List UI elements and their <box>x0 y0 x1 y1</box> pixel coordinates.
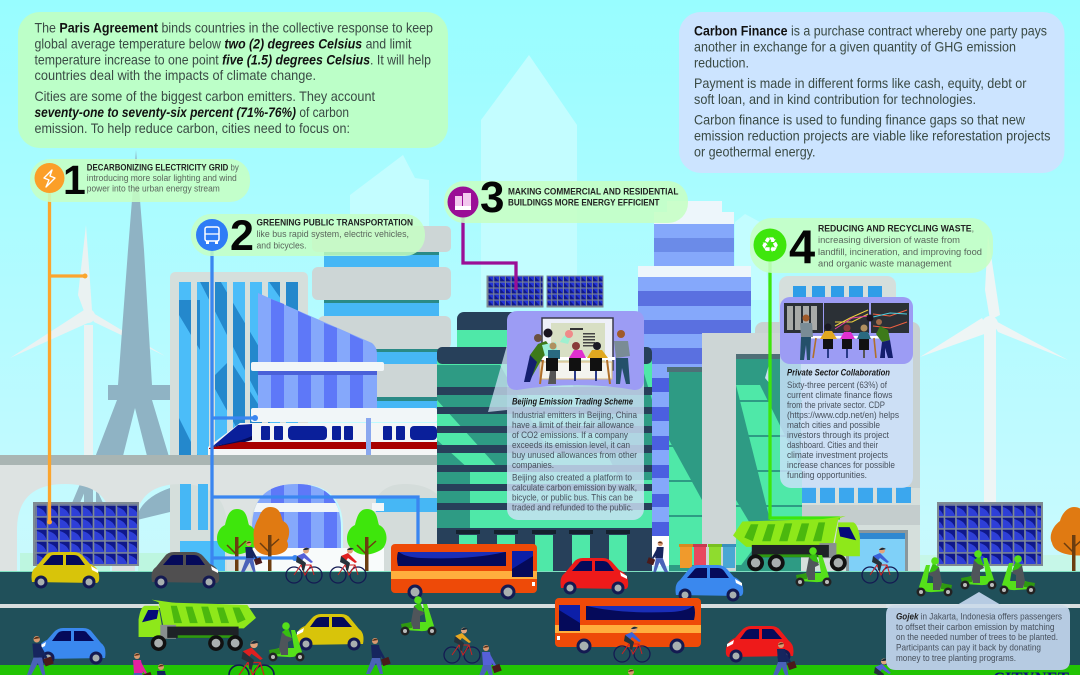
panel: Paris Agreement: seventy-one to seventy-six percent (71%-76%) of carbon <box>34 104 349 120</box>
icon: lightning bolt <box>34 163 64 193</box>
orange bus bottom <box>555 598 701 654</box>
panel: Carbon Finance: reduction. <box>694 54 749 70</box>
step 2: greening public transportation <box>191 212 425 260</box>
icon: recycle <box>754 228 786 262</box>
text: private sector: investors through its project <box>787 430 889 440</box>
panel: Paris Agreement: The Paris Agreement binds countries in the collective response to keep <box>34 20 433 36</box>
text: Beijing scheme: exceeds its emission level, it can <box>512 440 630 450</box>
right grey and teal buildings <box>667 276 920 572</box>
text: Beijing scheme: Beijing also created a platform to <box>512 472 632 482</box>
text: private sector: climate investment projects <box>787 450 888 460</box>
text: Beijing scheme: traded and refunded to the public. <box>512 502 633 512</box>
step 1: decarbonizing electricity grid: introducing more solar lighting and wind <box>87 173 237 183</box>
panel: Carbon Finance: another in exchange for a given quantity of GHG emission <box>694 38 1016 54</box>
panel: Paris Agreement: emission. To help reduce carbon, cities need to focus on: <box>34 120 350 136</box>
step 4: reducing and recycling waste: REDUCING AND RECYCLING WASTE, <box>818 224 974 234</box>
callout: Gojek: to offset their carbon emission by matching <box>896 622 1054 632</box>
text: Beijing scheme: of CO2 emissions. If a company <box>512 430 628 440</box>
text: private sector: current climate finance flows <box>787 390 893 400</box>
icon: building <box>448 186 478 218</box>
text: private sector: from the private sector. CDP <box>787 400 885 410</box>
panel: Paris Agreement: temperature increase to one point five (1.5) degrees Celsius. It will help <box>34 51 431 67</box>
step 4: reducing and recycling waste: landfill, incineration, and improving food <box>818 247 982 257</box>
text: Beijing scheme: Beijing Emission Trading Scheme <box>512 396 634 408</box>
panel: Paris Agreement: countries deal with the impacts of climate change. <box>34 67 316 83</box>
orange bus top <box>391 544 537 600</box>
scooters <box>400 596 436 636</box>
text: Beijing scheme: have a limit of their fair allowance <box>512 420 634 430</box>
illustration: team at whiteboard <box>507 311 644 390</box>
step 1: decarbonizing electricity grid: DECARBONIZING ELECTRICITY GRID by <box>87 162 239 172</box>
pedestrians <box>27 636 54 675</box>
step 4: reducing and recycling waste: and organic waste management <box>818 258 952 268</box>
step 4: reducing and recycling waste <box>750 218 993 273</box>
text: private sector: Private Sector Collaboration <box>787 368 890 379</box>
panel: Carbon Finance <box>679 12 1064 173</box>
text: private sector: Sixty-three percent (63%) of <box>787 380 887 390</box>
text: Beijing scheme <box>512 396 638 512</box>
step 2: greening public transportation: 2 <box>230 212 254 260</box>
connector lines <box>47 193 840 575</box>
recycling bins <box>679 544 736 568</box>
red car bottom <box>726 626 794 662</box>
step 1: decarbonizing electricity grid: power into the urban energy stream <box>87 184 220 194</box>
right wind turbine <box>920 235 1068 510</box>
callout: Gojek: Participants can pay it back by donating <box>896 642 1041 652</box>
callout: Gojek: Gojek in Jakarta, Indonesia offers passengers <box>896 612 1062 622</box>
text: private sector: increase chances for possible <box>787 460 895 470</box>
panel: Carbon Finance: Carbon finance is used to funding finance gaps so that new <box>694 112 1026 128</box>
grass strip <box>0 665 1080 675</box>
text: private sector <box>787 368 899 480</box>
left wind turbine <box>10 225 165 465</box>
panel: Paris Agreement: Cities are some of the biggest carbon emitters. They account <box>34 88 375 104</box>
text: private sector: dashboard. Cities and their <box>787 440 878 450</box>
building: blue striped tower <box>170 272 310 572</box>
eiffel tower <box>94 150 170 460</box>
icon: bus <box>196 219 228 251</box>
panel: Carbon Finance: emission reduction projects are viable like reforestation projects <box>694 128 1050 144</box>
text: Beijing scheme: bicycle, or public bus. This can be <box>512 492 633 502</box>
dump truck right <box>733 516 860 571</box>
cyclists <box>286 548 322 583</box>
road <box>0 571 1080 666</box>
illustration: team with market screens <box>780 297 913 364</box>
step 3: energy efficient buildings: MAKING COMMERCIAL AND RESIDENTIAL <box>508 186 679 196</box>
ghost skyline <box>350 55 770 300</box>
callout: Gojek: money to tree planting programs. <box>896 653 1016 663</box>
text: Beijing scheme: Industrial emitters in Beijing, China <box>512 410 638 420</box>
step 1: decarbonizing electricity grid <box>30 157 250 203</box>
panel: Paris Agreement: global average temperature below two (2) degrees Celsius and limit <box>34 36 412 52</box>
vehicles <box>27 516 1036 675</box>
panel: Paris Agreement <box>18 12 448 148</box>
step 4: reducing and recycling waste: 4 <box>789 220 815 273</box>
text: private sector: match cities and possible <box>787 420 880 430</box>
card: Private Sector Collaboration <box>780 297 913 488</box>
panel: Carbon Finance: Carbon Finance is a purchase contract whereby one party pays <box>694 22 1047 38</box>
building: grey banded block <box>312 226 451 414</box>
text: Beijing scheme: companies. <box>512 460 554 470</box>
step 3: energy efficient buildings: 3 <box>480 173 504 222</box>
yellow car <box>32 552 99 588</box>
elevated train <box>208 418 437 458</box>
icon: recycle: ♻ <box>761 233 779 257</box>
callout: Gojek: on the needed number of trees to be planted. <box>896 632 1058 642</box>
step 1: decarbonizing electricity grid: 1 <box>63 157 86 203</box>
step 2: greening public transportation: GREENING PUBLIC TRANSPORTATION <box>256 218 413 228</box>
panel: Carbon Finance: soft loan, and in kind contribution for technologies. <box>694 91 976 107</box>
viaduct <box>0 455 437 574</box>
panel: Carbon Finance: Payment is made in different forms like cash, equity, debt or <box>694 75 1027 91</box>
step 2: greening public transportation: and bicycles. <box>256 240 306 250</box>
red car top <box>560 558 628 594</box>
big tiered blue tower <box>638 201 751 566</box>
step 3: energy efficient buildings <box>444 173 688 223</box>
green striped central building <box>437 312 652 572</box>
solar panels right <box>938 503 1042 565</box>
step 2: greening public transportation: like bus rapid system, electric vehicles, <box>256 229 409 239</box>
text: Beijing scheme: buy unused allowances from other <box>512 450 637 460</box>
blue car left <box>38 628 106 664</box>
trees <box>217 507 1080 573</box>
callout: Gojek <box>886 592 1070 670</box>
yellow car middle <box>296 614 364 650</box>
step 3: energy efficient buildings: BUILDINGS MORE ENERGY EFFICIENT <box>508 198 660 208</box>
step 4: reducing and recycling waste: increasing diversion of waste from <box>818 235 960 245</box>
text: Beijing scheme: calculate carbon emission by walk, <box>512 482 637 492</box>
grey car <box>152 552 219 588</box>
ground strip behind right side <box>920 555 1080 572</box>
building: curved blue block <box>251 293 437 422</box>
solar panels left <box>34 503 138 565</box>
card: Beijing Emission Trading Scheme <box>488 311 644 520</box>
rooftop solar panels <box>487 276 603 307</box>
dump truck left <box>139 600 256 651</box>
text: private sector: (https://www.cdp.net/en) helps <box>787 410 899 420</box>
blue car right <box>676 565 743 602</box>
text: private sector: funding opportunities. <box>787 470 867 480</box>
panel: Carbon Finance: or geothermal energy. <box>694 143 816 159</box>
